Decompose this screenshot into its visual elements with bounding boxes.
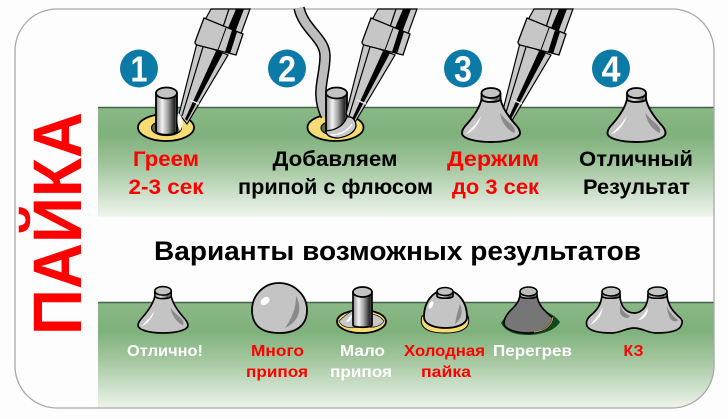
panel: bottom green board xyxy=(98,302,718,410)
label: cold joint: Холодная xyxy=(404,343,485,360)
label: too little solder: Мало xyxy=(340,343,385,360)
illustration: short circuit bridge xyxy=(586,287,682,333)
icon: step 2 number xyxy=(268,48,306,90)
step 3 label xyxy=(447,148,540,199)
label: cold joint xyxy=(404,343,485,381)
label: too little solder xyxy=(330,343,392,381)
label: too much solder xyxy=(246,343,308,381)
step 1 label xyxy=(128,148,204,199)
label: cold joint: пайка xyxy=(421,364,471,381)
step 4 label: Отличный xyxy=(579,148,693,171)
illustration: too little solder xyxy=(337,287,386,333)
label: too much solder: Много xyxy=(251,343,304,360)
illustration: step 1 heating the pin xyxy=(138,9,250,141)
icon: step 4 number xyxy=(592,48,630,90)
step 4 label xyxy=(579,148,693,199)
illustration: good joint xyxy=(138,287,188,333)
label: good: Отлично! xyxy=(127,343,203,360)
step 1 label: 2-3 сек xyxy=(128,176,204,199)
label: too little solder: припоя xyxy=(330,364,392,381)
illustration: too much solder xyxy=(252,283,307,333)
step 4 label: Результат xyxy=(583,176,690,199)
heading: result variants: Варианты возможных результатов xyxy=(154,236,641,266)
icon: step 4 number: 4 xyxy=(602,48,620,90)
icon: step 1 number: 1 xyxy=(130,48,148,90)
illustration: overheated joint xyxy=(501,287,560,335)
step 3 label: до 3 сек xyxy=(452,176,540,199)
label: overheated: Перегрев xyxy=(493,343,572,360)
icon: step 2 number: 2 xyxy=(278,48,296,90)
illustration: step 3 holding the iron xyxy=(462,9,573,142)
illustration: cold joint xyxy=(421,288,469,333)
step 2 label: Добавляем xyxy=(272,148,398,171)
step 1 label: Греем xyxy=(133,148,199,171)
title: ПАЙКА: ПАЙКА xyxy=(18,112,96,335)
icon: step 3 number xyxy=(444,48,482,90)
icon: step 1 number xyxy=(120,48,158,90)
panel: top green board xyxy=(98,108,718,216)
step 3 label: Держим xyxy=(447,148,539,171)
icon: step 3 number: 3 xyxy=(454,48,472,90)
illustration: step 4 finished joint xyxy=(608,88,666,142)
label: too much solder: припоя xyxy=(246,364,308,381)
label: short circuit: КЗ xyxy=(624,343,644,360)
step 2 label xyxy=(238,148,433,199)
illustration: step 2 adding solder xyxy=(299,8,417,141)
step 2 label: припой с флюсом xyxy=(238,176,433,199)
